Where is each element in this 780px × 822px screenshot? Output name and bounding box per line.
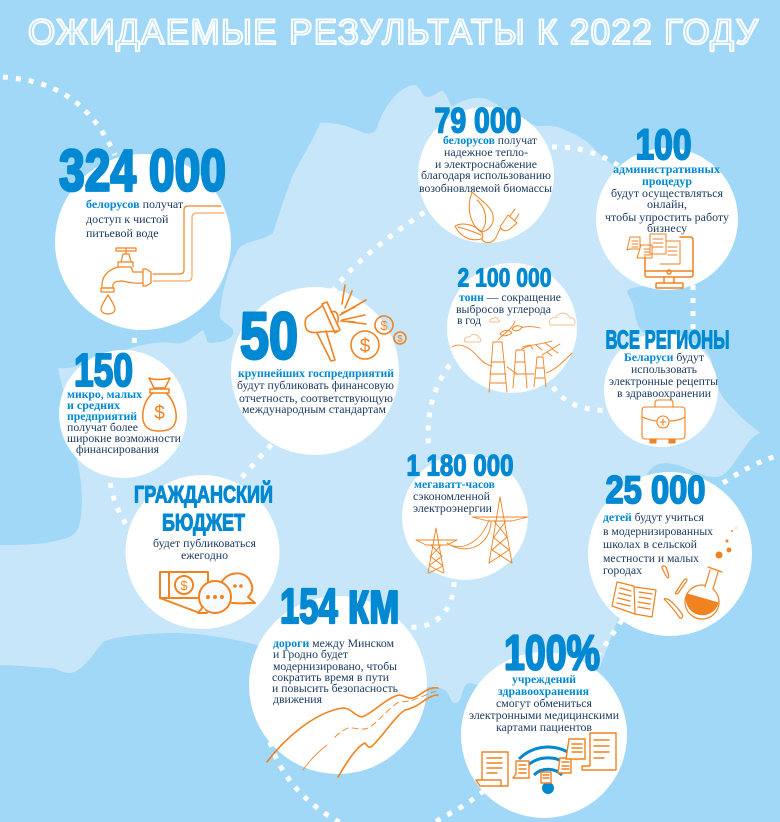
text: procedures: административных (613, 162, 720, 176)
text: e-prescriptions: использовать (631, 362, 698, 376)
map of Belarus (0, 85, 760, 703)
number: 1 180 000: 1 180 000 (406, 450, 514, 482)
text: healthcare: учреждений (512, 672, 576, 686)
text: MWh: мегаватт-часов (414, 477, 495, 491)
heading: civic budget: БЮДЖЕТ (162, 510, 245, 536)
panel: 150 enterprises (59, 344, 187, 478)
text: procedures: бизнесу (647, 221, 687, 235)
text: enterprises: финансирования (76, 442, 159, 456)
text: healthcare: смогут обмениться (496, 696, 592, 710)
number: 25 000: 25 000 (606, 469, 706, 512)
icon: banknote and speech bubbles (160, 572, 255, 613)
icon: megaphone and coins (305, 285, 406, 361)
title: ОЖИДАЕМЫЕ РЕЗУЛЬТАТЫ К 2022 ГОДУ (28, 13, 759, 52)
text: biomass: белорусов получат (443, 133, 538, 147)
icon: megaphone and coins: $ (360, 336, 371, 357)
text: biomass: возобновляемой биомассы (419, 181, 552, 195)
number: 100: 100 (636, 121, 692, 169)
text: clean water: питьевой воде (86, 226, 159, 240)
text: road: и повысить безопасность (272, 681, 399, 695)
text: children: школах в сельской (603, 537, 698, 551)
number: 150: 150 (74, 344, 133, 396)
text: healthcare: здравоохранения (498, 684, 589, 698)
icon: leaves and plug (455, 192, 519, 242)
text: civic budget: будет публиковаться (153, 536, 256, 550)
panel: 50 state enterprises (231, 285, 406, 455)
text: children: местности и малых (603, 551, 699, 565)
icon: megaphone and coins: $ (380, 318, 388, 333)
text: state enterprises: крупнейших госпредприятий (238, 366, 394, 380)
text: state enterprises: отчетность, соответствующую (239, 391, 393, 405)
text: healthcare: картами пациентов (496, 720, 592, 734)
icon: book, clips and flask (612, 527, 737, 619)
icon: winding road (267, 688, 438, 777)
text: civic budget: ежегодно (181, 548, 228, 562)
icon: banknote and speech bubbles: $ (180, 578, 188, 593)
text: MWh: сэкономленной (413, 489, 491, 503)
text: children: детей будут учиться (603, 510, 706, 524)
text: enterprises: получат более (67, 420, 138, 434)
text: clean water: белорусов получат (86, 197, 183, 211)
number: 79 000: 79 000 (434, 102, 522, 140)
text: procedures: будут осуществляться (611, 186, 723, 200)
text: enterprises: предприятий (67, 409, 137, 423)
panel: 100 procedures (596, 121, 738, 290)
panel: 25 000 children (588, 469, 752, 636)
text: e-prescriptions: Беларуси будут (624, 350, 705, 364)
icon: money bag: $ (154, 403, 165, 424)
text: road: модернизировано, чтобы (273, 659, 397, 673)
text: healthcare: электронными медицинскими (469, 708, 620, 722)
icon: wifi and documents (476, 733, 616, 794)
panel: 2 100 000 tonnes (447, 263, 577, 393)
heading: civic budget: ГРАЖДАНСКИЙ (134, 480, 273, 508)
text: e-prescriptions: в здравоохранении (617, 386, 712, 400)
text: enterprises: микро, малых (67, 387, 142, 401)
text: road: и Гродно будет (273, 647, 349, 661)
text: enterprises: и средних (67, 398, 120, 412)
text: tonnes: тонн — сокращение (459, 290, 563, 304)
text: biomass: благодаря использованию (421, 168, 551, 182)
icon: computer and documents (627, 234, 693, 288)
panel: 1 180 000 MWh (402, 450, 528, 580)
icon: medical case (642, 400, 685, 443)
panel: civic budget (126, 475, 280, 629)
icon: water tap and pipe (101, 206, 224, 314)
text: children: в модернизированных (603, 524, 713, 538)
text: MWh: электроэнергии (413, 501, 493, 515)
icon: megaphone and coins: $ (397, 334, 403, 344)
text: state enterprises: будут публиковать финансовую (237, 378, 394, 392)
text: road: дороги между Минском (273, 636, 396, 650)
text: procedures: чтобы упростить работу (605, 210, 729, 224)
text: tonnes: в год (457, 313, 481, 327)
text: enterprises: широкие возможности (67, 431, 182, 445)
number: 154 km: 154 км (280, 569, 400, 636)
text: tonnes: выбросов углерода (456, 302, 552, 316)
number: 324 000: 324 000 (59, 138, 226, 204)
number: 100%: 100% (504, 626, 600, 680)
panel: all regions e-prescriptions (604, 326, 730, 447)
text: procedures: онлайн, (647, 197, 687, 211)
icon: chimneys, plants and clouds (452, 313, 575, 392)
panel: 154 km road (249, 569, 438, 777)
text: biomass: и электроснабжение (435, 157, 537, 171)
text: biomass: надежное тепло- (444, 145, 528, 159)
text: children: городах (603, 563, 642, 577)
number: 2 100 000: 2 100 000 (458, 264, 552, 292)
text: e-prescriptions: электронные рецепты (609, 374, 718, 388)
panel: 324 000 clean water (55, 138, 231, 330)
panel: 100% healthcare (461, 626, 627, 818)
text: procedures: процедур (642, 174, 692, 188)
text: state enterprises: международным стандартам (242, 402, 386, 416)
icon: power towers (416, 497, 528, 573)
text: road: движения (273, 692, 322, 706)
number: 50: 50 (240, 298, 298, 372)
panel: 79 000 biomass (418, 102, 554, 243)
text: road: сократить время в пути (272, 670, 390, 684)
text: clean water: доступ к чистой (86, 212, 169, 226)
